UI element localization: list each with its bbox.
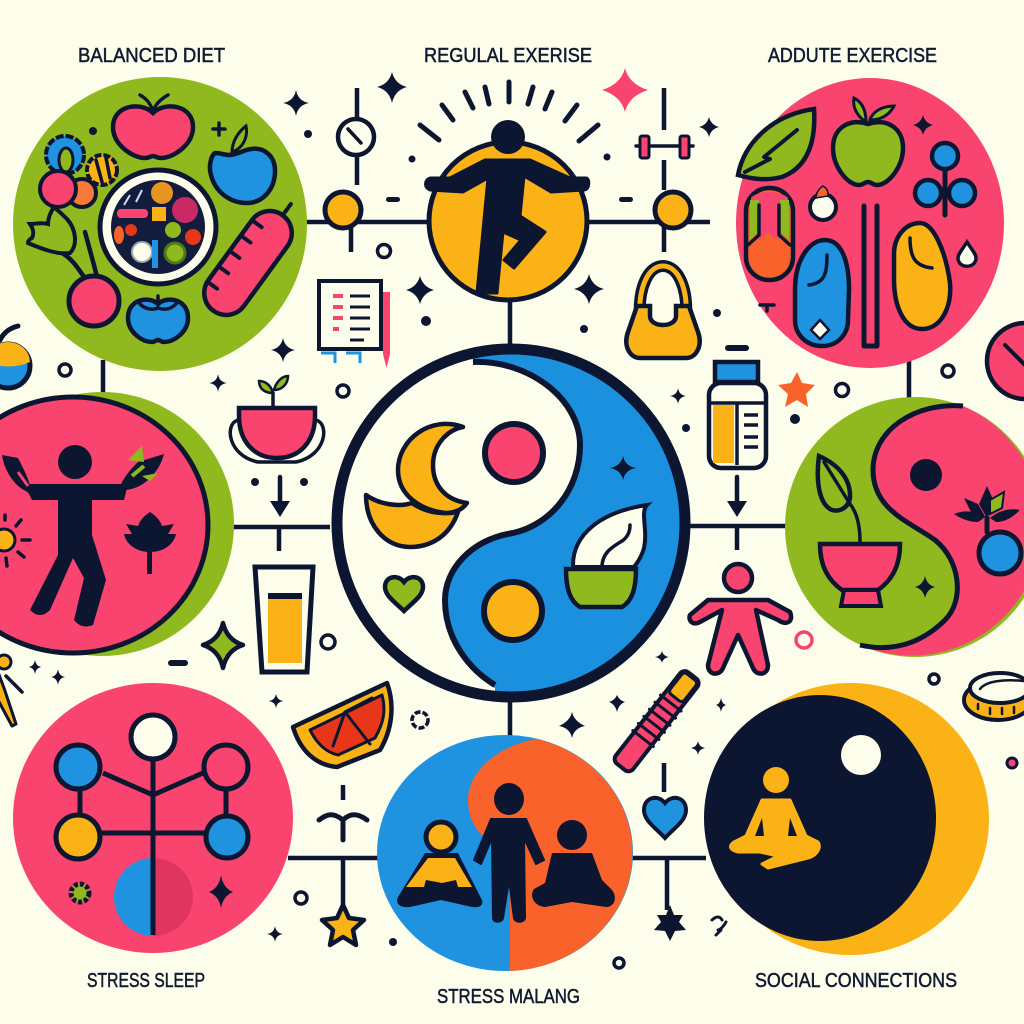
icon: sparkle (209, 875, 233, 908)
heading: balanced diet: BALANCED DIET (78, 45, 225, 67)
icon: bowl with plant (818, 456, 902, 606)
icon: supplement bottle (709, 362, 766, 468)
icon: pink person (689, 564, 791, 674)
icon: pink node right (204, 745, 248, 789)
icon: right edge no-sign (987, 323, 1024, 399)
icon: down arrow left (270, 477, 290, 517)
icon: clock on pole (338, 119, 374, 155)
icon: blue node right (206, 816, 248, 858)
icon: plus (213, 123, 225, 135)
icon: standing figure with leaves (2, 445, 164, 627)
icon: tiny plant (712, 917, 726, 935)
icon: small green flower (71, 884, 89, 902)
icon: crescent moon (366, 424, 467, 547)
icon: green sparkle (203, 623, 243, 668)
icon: yellow capsule (894, 223, 950, 329)
icon: green heart (385, 577, 423, 611)
icon: plate of food (100, 170, 216, 284)
icon: cherry with leaf (28, 207, 119, 326)
icon: blue fruit with plant (954, 486, 1021, 574)
icon: blue node left (56, 745, 100, 789)
icon: teacup with sprout (230, 376, 324, 462)
icon: yellow node right (655, 192, 691, 228)
icon: meditating figure (731, 767, 819, 868)
icon: seated yellow figure (397, 822, 482, 907)
icon: yellow node left (325, 192, 361, 228)
icon: jumping figure (426, 120, 589, 293)
icon: chopsticks (864, 206, 877, 346)
panel: adequate exercise circle (736, 78, 1004, 368)
icon: black dot (910, 459, 942, 491)
heading: social connections: SOCIAL CONNECTIONS (755, 970, 957, 992)
icon: flame drop (810, 186, 836, 220)
panel: meditation moon circle (704, 683, 989, 955)
icon: blue sparkle (610, 456, 636, 480)
icon: left edge fruit (0, 326, 30, 388)
panel: right yin-yang circle (785, 397, 1024, 657)
icon: orange slice (293, 683, 391, 767)
icon: down arrow right (727, 477, 747, 517)
panel: yin yang centre (337, 349, 685, 697)
icon: left edge runner (0, 655, 22, 726)
panel: left figure circle (0, 392, 234, 656)
icon: yellow star (322, 905, 364, 945)
icon: standing adult figure (474, 783, 544, 922)
icon: sparkle (913, 115, 933, 135)
heading: stress sleep: STRESS SLEEP (87, 970, 205, 992)
icon: lotus (124, 512, 176, 574)
icon: bowl with leaf (566, 505, 647, 607)
panel: family circle (377, 735, 633, 971)
heading: adequate exercise: ADDUTE EXERCISE (768, 45, 937, 67)
icon: tape measure (964, 673, 1024, 720)
icon: t mark (760, 305, 774, 311)
icon: pink star (602, 68, 648, 112)
icon: seated child figure (532, 820, 615, 907)
icon: clipboard checklist (319, 281, 390, 368)
icon: blue heart (644, 798, 686, 838)
icon: yellow node (56, 815, 100, 859)
icon: dark star (654, 905, 686, 941)
icon: orange star (778, 372, 815, 407)
heading: regular exercise: REGULAL EXERISE (424, 45, 592, 67)
icon: droplet (958, 242, 976, 266)
icon: yellow dot (484, 582, 542, 640)
icon: blue molecule (915, 143, 975, 215)
icon: bottom blue fruit (128, 300, 188, 342)
icon: blue apple (210, 149, 275, 203)
icon: dumbbell (636, 136, 693, 158)
panel: stress sleep circle (13, 683, 293, 953)
icon: sun (0, 515, 30, 566)
icon: mixed fruit cluster (40, 136, 117, 207)
icon: pink dot (485, 424, 543, 482)
icon: white moon dot (841, 735, 881, 775)
panel: regular exercise circle (420, 82, 598, 300)
icon: pink sausage with ticks (196, 191, 309, 324)
icon: orange capsule (746, 188, 793, 280)
icon: pink apple (113, 106, 193, 158)
half circle blue and pink (114, 858, 153, 936)
icon: blue capsule (795, 240, 849, 346)
icon: sparkle on green (915, 576, 935, 598)
sun rays (420, 82, 598, 141)
icon: white node (131, 715, 175, 759)
icon: handbag (626, 266, 700, 358)
icon: leaf (738, 109, 814, 179)
icon: massager roller (611, 668, 703, 775)
panel: balanced diet circle (13, 77, 309, 371)
icon: green apple (833, 122, 903, 185)
icon: sprout symbol (319, 815, 367, 840)
icon: juice glass (255, 567, 313, 672)
heading: stress managing: STRESS MALANG (437, 986, 580, 1008)
